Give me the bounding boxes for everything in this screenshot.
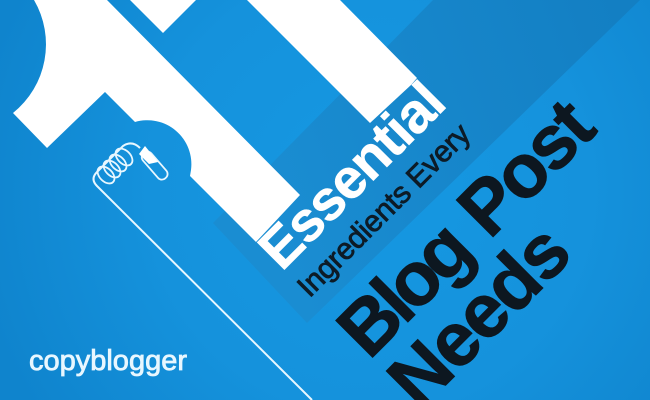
dark diagonal band [213, 0, 640, 323]
icon: coil and test tube [94, 143, 312, 400]
numeral 1 first digit [13, 0, 300, 242]
test tube [139, 146, 170, 182]
heading: Essential: Essential [246, 69, 457, 281]
coil loops [94, 145, 136, 187]
subheading: Ingredients Every: Ingredients Every [291, 117, 477, 303]
numeral 1 second digit stem [247, 0, 417, 123]
word: Post: Post [441, 83, 611, 253]
connector line [94, 143, 312, 400]
heading: Blog Post [321, 83, 611, 373]
numeral 1 second digit flag [130, 0, 196, 33]
logo: copyblogger: copyblogger [29, 345, 187, 377]
word: Blog: Blog [321, 205, 489, 373]
